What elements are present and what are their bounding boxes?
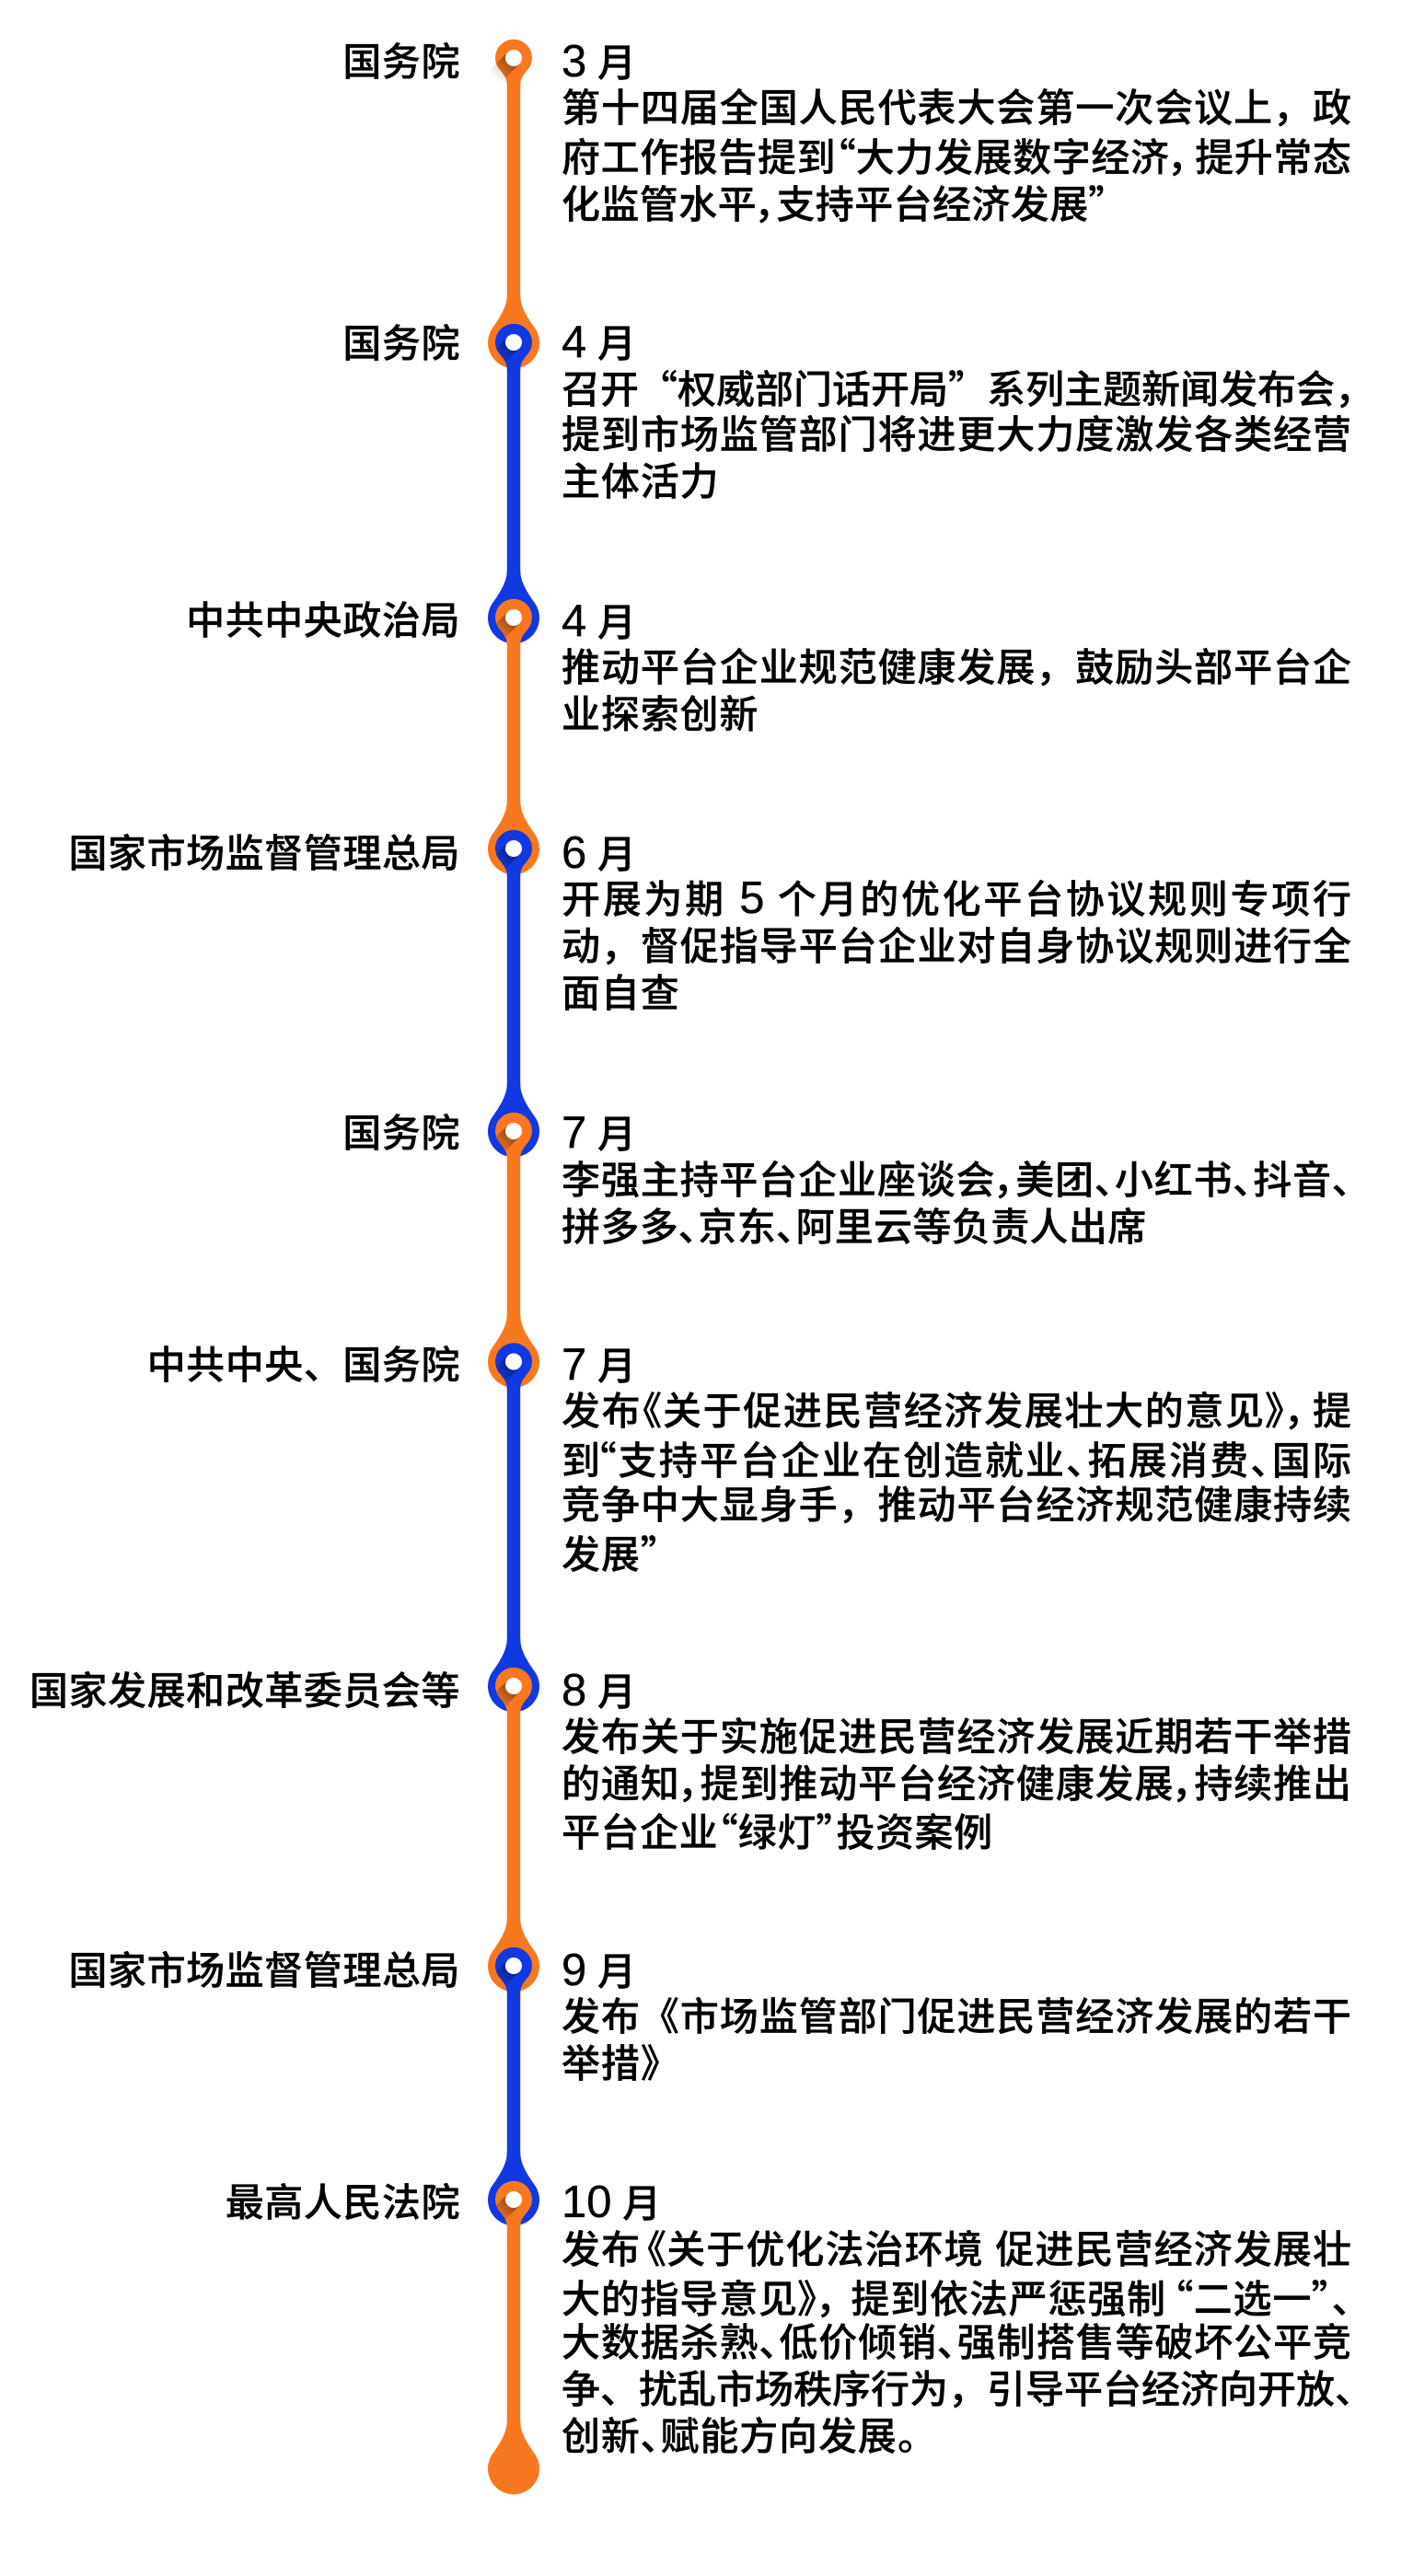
text: 动，督促指导平台企业对自身协议规则进行全 bbox=[562, 925, 1351, 968]
issuer label: 国家市场监督管理总局 bbox=[68, 1949, 460, 1993]
description bbox=[562, 359, 1373, 503]
text: 发布《市场监管部门促进民营经济发展的若干 bbox=[562, 1995, 1351, 2039]
text: 拼多多、京东、阿里云等负责人出席 bbox=[562, 1206, 1147, 1249]
month: 8 月 bbox=[562, 1666, 636, 1715]
text: 发布《关于促进民营经济发展壮大的意见》，提 bbox=[562, 1390, 1351, 1433]
text: 创新、赋能方向发展。 bbox=[562, 2415, 918, 2458]
node 9: orange, October bbox=[488, 2152, 539, 2424]
text: 第十四届全国人民代表大会第一次会议上，政 bbox=[562, 87, 1351, 130]
text: 争、扰乱市场秩序行为，引导平台经济向开放、 bbox=[562, 2368, 1373, 2411]
entry: July, State Council bbox=[342, 1108, 1351, 1249]
description bbox=[562, 1390, 1351, 1580]
timeline spine with nodes bbox=[488, 39, 539, 2494]
node 2: blue, April bbox=[488, 295, 539, 574]
entry: August bbox=[29, 1666, 1351, 1858]
text: 竞争中大显身手，推动平台经济规范健康持续 bbox=[562, 1484, 1351, 1527]
text: 面自查 bbox=[562, 972, 680, 1015]
entry: October bbox=[226, 2177, 1373, 2458]
text: 大的指导意见》， 提到依法严惩强制“二选一”、 bbox=[562, 2269, 1351, 2325]
node 5: orange, July bbox=[488, 1083, 539, 1318]
description bbox=[562, 87, 1351, 230]
end cap teardrop bbox=[488, 2420, 539, 2494]
issuer label: 最高人民法院 bbox=[226, 2181, 460, 2224]
issuer label: 国务院 bbox=[342, 40, 460, 84]
issuer label: 国家发展和改革委员会等 bbox=[29, 1669, 460, 1713]
text: 提到市场监管部门将进更大力度激发各类经营 bbox=[562, 413, 1351, 456]
issuer label: 中共中央、国务院 bbox=[147, 1344, 460, 1387]
description bbox=[562, 2228, 1373, 2458]
entry: April, State Council bbox=[342, 318, 1373, 503]
text: 举措》 bbox=[562, 2042, 680, 2085]
text: 推动平台企业规范健康发展，鼓励头部平台企 bbox=[562, 646, 1351, 689]
entry: April, Politburo bbox=[186, 596, 1351, 736]
description bbox=[562, 646, 1351, 736]
month: 3 月 bbox=[562, 37, 636, 87]
text: 发展” bbox=[562, 1524, 680, 1580]
text: 开展为期 5 个月的优化平台协议规则专项行 bbox=[562, 873, 1351, 923]
month: 4 月 bbox=[562, 318, 636, 367]
text: 业探索创新 bbox=[562, 693, 759, 736]
entry: July, CPC and State Council bbox=[147, 1340, 1351, 1580]
month: 10 月 bbox=[562, 2177, 661, 2227]
month: 9 月 bbox=[562, 1946, 636, 1995]
month: 6 月 bbox=[562, 828, 636, 878]
node 3: orange, April bbox=[488, 570, 539, 804]
node 7: orange, August bbox=[488, 1638, 539, 1922]
description bbox=[562, 873, 1351, 1015]
text: 主体活力 bbox=[562, 460, 719, 503]
month: 4 月 bbox=[562, 596, 636, 646]
entry: June bbox=[68, 828, 1351, 1015]
text: 发布关于实施促进民营经济发展近期若干举措 bbox=[562, 1715, 1351, 1759]
month: 7 月 bbox=[562, 1108, 636, 1158]
text: 府工作报告提到“大力发展数字经济，提升常态 bbox=[562, 127, 1351, 183]
node 8: blue, September bbox=[488, 1918, 539, 2155]
description bbox=[562, 1995, 1351, 2085]
issuer label: 国家市场监督管理总局 bbox=[68, 832, 460, 875]
text: 到“支持平台企业在创造就业、拓展消费、国际 bbox=[562, 1430, 1351, 1486]
issuer label: 国务院 bbox=[342, 1112, 460, 1155]
text: 的通知，提到推动平台经济健康发展，持续推出 bbox=[562, 1762, 1351, 1806]
text: 大数据杀熟、低价倾销、强制搭售等破坏公平竞 bbox=[562, 2321, 1351, 2364]
text: 化监管水平，支持平台经济发展” bbox=[562, 174, 1108, 230]
issuer label: 中共中央政治局 bbox=[186, 599, 460, 642]
issuer label: 国务院 bbox=[342, 322, 460, 365]
description bbox=[562, 1715, 1351, 1858]
text: 平台企业“绿灯”投资案例 bbox=[562, 1802, 993, 1858]
entry: March bbox=[342, 37, 1351, 230]
node 6: blue, July bbox=[488, 1314, 539, 1642]
month: 7 月 bbox=[562, 1340, 636, 1390]
text: 李强主持平台企业座谈会，美团、小红书、抖音、 bbox=[562, 1159, 1351, 1202]
text: 发布《关于优化法治环境 促进民营经济发展壮 bbox=[562, 2228, 1351, 2271]
node 1: orange start, March bbox=[490, 39, 532, 298]
text: 召开“权威部门话开局”系列主题新闻发布会， bbox=[562, 359, 1373, 415]
node 4: blue, June bbox=[488, 801, 539, 1088]
entry: September bbox=[68, 1946, 1351, 2085]
description bbox=[562, 1159, 1351, 1249]
